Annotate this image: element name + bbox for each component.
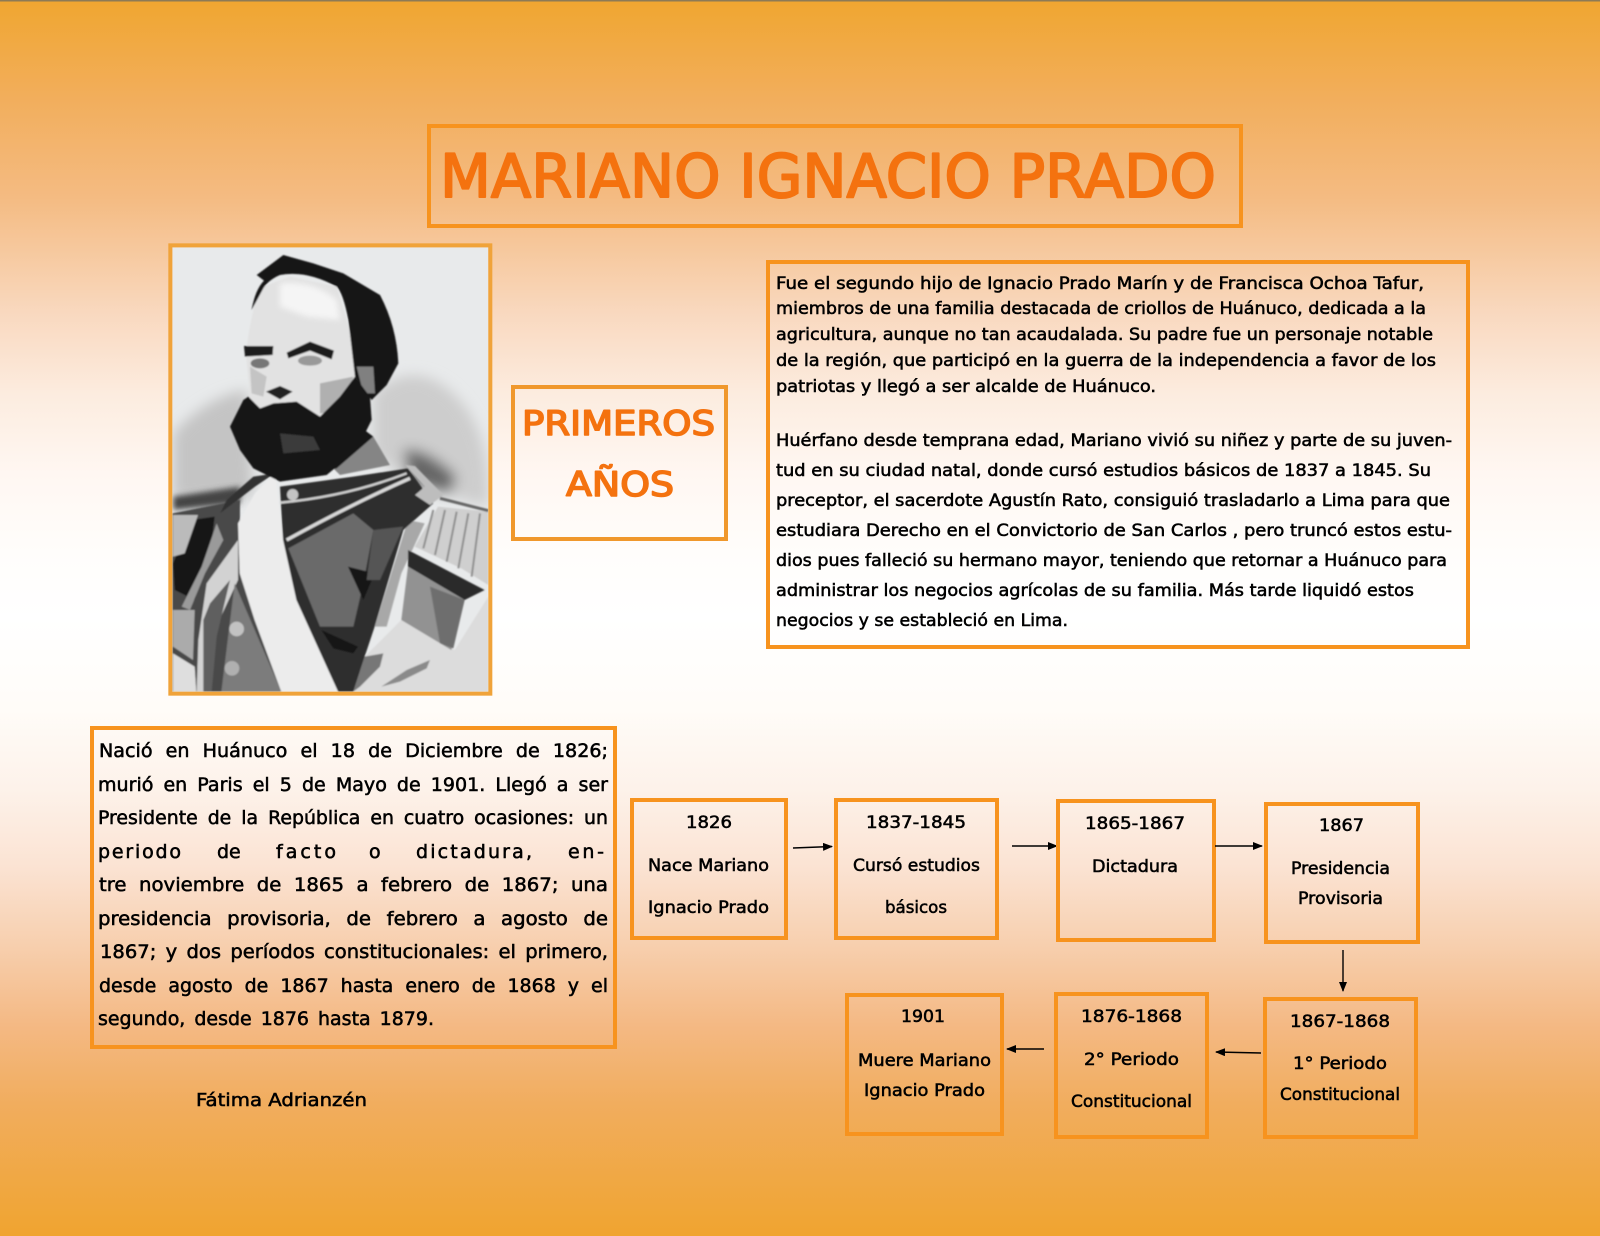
arrow: 1867-1868 to 1876-1868 [1216, 1052, 1261, 1053]
panel: primeros años heading [513, 387, 726, 539]
timeline box: 1901: Muere Mariano [858, 1051, 991, 1071]
author credit: Fátima Adrianzén [196, 1090, 367, 1111]
timeline box: 1865-1867: 1865-1867 [1085, 814, 1185, 834]
neck shadow [277, 427, 373, 480]
beard [230, 377, 372, 482]
arrow: 1876-1868 to 1901 [1007, 1048, 1044, 1050]
panel: early life text: miembros de una familia destacada de criollos de Huánuco, dedicada a la [776, 299, 1426, 319]
lower right pale coat [353, 597, 488, 692]
arrow: 1837-1845 to 1865-1867 [1012, 845, 1057, 847]
left side of torso [172, 500, 281, 692]
panel: biography summary text: segundo, desde 1876 hasta 1879. [98, 1008, 434, 1030]
panel: biography summary text [92, 728, 615, 1047]
panel: biography summary text: tre noviembre de 1865 a febrero de 1867; una [99, 874, 608, 896]
title [429, 126, 1241, 226]
timeline box: 1876-1868: Constitucional [1071, 1092, 1192, 1112]
panel: early life text: patriotas y llegó a ser alcalde de Huánuco. [776, 377, 1156, 397]
timeline box: 1901 [847, 995, 1002, 1134]
panel: biography summary text: o [369, 841, 381, 863]
arrow: 1826 to 1837-1845 [793, 846, 832, 848]
panel: biography summary text: de [217, 841, 241, 863]
timeline box: 1837-1845: 1837-1845 [866, 813, 966, 833]
piping [280, 473, 407, 503]
timeline box: 1867: Provisoria [1298, 889, 1383, 909]
timeline box: 1867 [1266, 804, 1418, 942]
portrait of Mariano Ignacio Prado [170, 245, 490, 694]
timeline box: 1901: Ignacio Prado [864, 1081, 985, 1101]
panel: early life text: administrar los negocios agrícolas de su familia. Más tarde liquidó estos [776, 581, 1414, 601]
mid grey right body [401, 567, 465, 650]
timeline box: 1837-1845: básicos [885, 898, 947, 918]
panel: biography summary text: Presidente de la República en cuatro ocasiones: un [98, 807, 608, 829]
timeline box: 1867-1868: 1867-1868 [1290, 1012, 1390, 1032]
panel: biography summary text: Nació en Huánuco el 18 de Diciembre de 1826; [99, 740, 608, 762]
timeline box: 1867-1868: 1° Periodo [1293, 1054, 1387, 1074]
sash [238, 473, 338, 692]
panel: early life text: Fue el segundo hijo de Ignacio Prado Marín y de Francisca Ochoa Tafur, [776, 274, 1424, 294]
timeline box: 1867: 1867 [1319, 816, 1364, 836]
panel: biography summary text: presidencia provisoria, de febrero a agosto de [98, 908, 608, 930]
panel: early life text: negocios y se estableció en Lima. [776, 611, 1068, 631]
panel: biography summary text: en- [568, 841, 604, 863]
timeline box: 1901: 1901 [901, 1007, 945, 1027]
timeline box: 1837-1845: Cursó estudios [853, 856, 980, 876]
timeline box: 1867-1868 [1265, 999, 1416, 1137]
shoulder strap [405, 465, 443, 505]
arrow: 1865-1867 to 1867 [1215, 845, 1262, 847]
timeline box: 1826 [632, 800, 786, 938]
main coat [280, 468, 433, 692]
arrow: 1867 down to 1867-1868 [1342, 950, 1344, 991]
panel: primeros años heading: PRIMEROS [522, 404, 715, 444]
panel: biography summary text: facto [276, 841, 336, 863]
panel: biography summary text: 1867; y dos períodos constitucionales: el primero, [100, 941, 608, 963]
panel: biography summary text: desde agosto de 1867 hasta enero de 1868 y el [99, 975, 608, 997]
title: MARIANO IGNACIO PRADO [440, 142, 1216, 212]
panel: early life text: estudiara Derecho en el Convictorio de San Carlos , pero truncó estos estu- [776, 521, 1452, 541]
collar [333, 437, 390, 475]
panel: early life text: dios pues falleció su hermano mayor, teniendo que retornar a Huánuco para [776, 551, 1447, 571]
eyebrows and eyes [244, 346, 273, 357]
hair [252, 255, 398, 400]
panel: early life text: agricultura, aunque no tan acaudalada. Su padre fue un personaje notable [776, 325, 1433, 345]
timeline box: 1865-1867 [1058, 801, 1214, 940]
timeline box: 1826: 1826 [686, 813, 732, 833]
panel: biography summary text: murió en Paris el 5 de Mayo de 1901. Llegó a ser [98, 774, 608, 796]
timeline box: 1867-1868: Constitucional [1280, 1085, 1400, 1105]
timeline box: 1826: Ignacio Prado [648, 898, 769, 918]
panel: primeros años heading: AÑOS [566, 465, 674, 505]
panel: early life text: preceptor, el sacerdote Agustín Rato, consiguió trasladarlo a Lima para que [776, 491, 1450, 511]
panel: biography summary text: dictadura, [416, 841, 532, 863]
timeline box: 1865-1867: Dictadura [1092, 857, 1178, 877]
panel: early life text: tud en su ciudad natal, donde cursó estudios básicos de 1837 a 1845. Su [776, 461, 1431, 481]
timeline box: 1876-1868: 1876-1868 [1081, 1007, 1182, 1027]
timeline box: 1867: Presidencia [1291, 859, 1390, 879]
panel: early life text [768, 262, 1468, 647]
timeline box: 1826: Nace Mariano [648, 856, 769, 876]
panel: early life text: Huérfano desde temprana edad, Mariano vivió su niñez y parte de su juven- [776, 431, 1452, 451]
right epaulet [415, 507, 488, 585]
timeline box: 1876-1868 [1056, 994, 1207, 1137]
timeline box: 1876-1868: 2° Periodo [1084, 1050, 1179, 1070]
face [243, 277, 367, 427]
timeline box: 1837-1845 [836, 800, 997, 938]
panel: biography summary text: periodo [98, 841, 181, 863]
panel: early life text: de la región, que participó en la guerra de la independencia a favor de los [776, 351, 1436, 371]
nose [266, 386, 293, 399]
